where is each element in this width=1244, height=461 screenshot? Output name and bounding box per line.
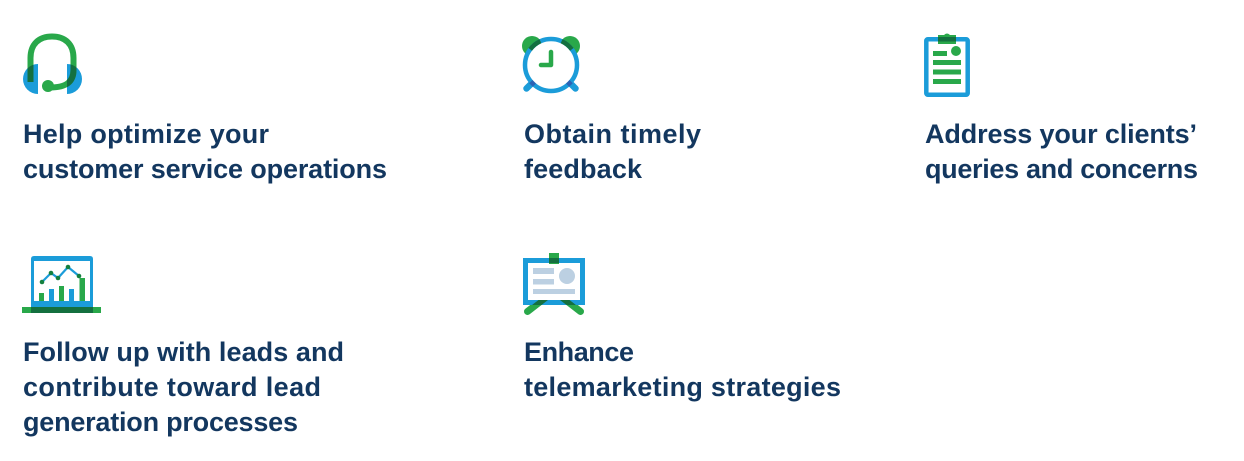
heading: enhance telemarketing: Enhance bbox=[524, 337, 634, 367]
heading: enhance telemarketing: telemarketing strategies bbox=[524, 372, 841, 402]
heading: address queries bbox=[925, 119, 1198, 184]
icon: laptop with chart bbox=[22, 256, 101, 313]
heading: follow up with leads: Follow up with leads and bbox=[23, 337, 344, 367]
heading: address queries: queries and concerns bbox=[925, 154, 1198, 184]
heading: obtain timely feedback: feedback bbox=[524, 154, 643, 184]
icon: alarm clock bbox=[522, 36, 580, 91]
icon: clipboard bbox=[926, 34, 968, 95]
heading: enhance telemarketing bbox=[524, 337, 841, 402]
icon: presentation board bbox=[526, 253, 582, 312]
heading: follow up with leads: contribute toward lead bbox=[23, 372, 321, 402]
heading: help optimize: Help optimize your bbox=[23, 119, 269, 149]
heading: follow up with leads: generation processes bbox=[23, 407, 298, 437]
icon: headset bbox=[23, 36, 82, 94]
heading: obtain timely feedback: Obtain timely bbox=[524, 119, 701, 149]
heading: help optimize: customer service operations bbox=[23, 154, 387, 184]
heading: help optimize bbox=[23, 119, 387, 184]
heading: obtain timely feedback bbox=[524, 119, 701, 184]
heading: follow up with leads bbox=[23, 337, 344, 437]
heading: address queries: Address your clients’ bbox=[925, 119, 1197, 149]
